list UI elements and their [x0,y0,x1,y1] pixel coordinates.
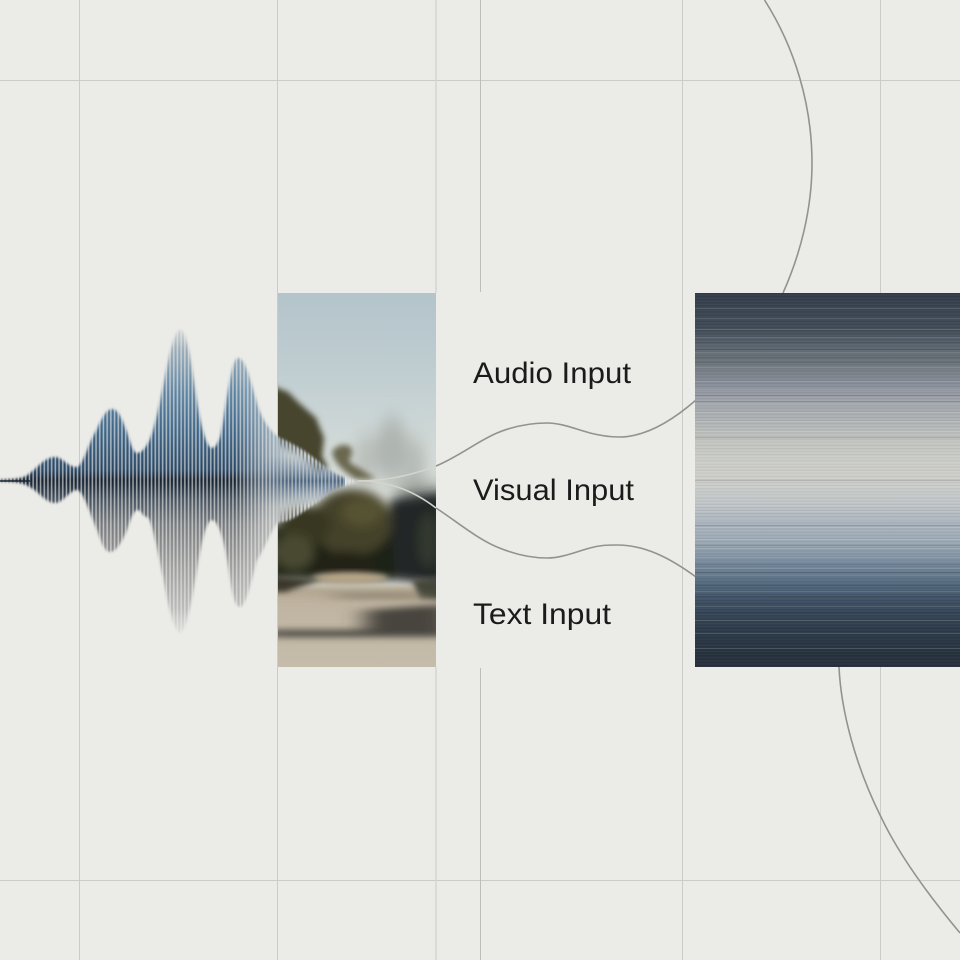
right shadow [412,576,445,600]
label: Audio Input: Audio Input [473,357,632,390]
label: Text Input: Text Input [473,598,612,631]
connector: fork over photo [358,466,436,508]
label: Visual Input: Visual Input [473,474,635,507]
ground highlight [312,572,388,584]
tail: dark start of the wave [0,480,30,482]
top arc [764,0,812,293]
ground [278,584,436,667]
sky [278,293,436,518]
mist trees [353,412,436,503]
waveform [0,320,370,645]
connector: lower curve [436,508,696,577]
upper left tree [270,385,328,472]
left shade on road edge [270,576,320,592]
connector: upper curve [436,400,696,466]
road shadows [262,594,452,637]
small tuft [332,445,376,479]
photo: blurred landscape [278,293,436,667]
tree mass [270,489,445,585]
bottom arc [839,667,960,933]
striped output panel [695,293,960,667]
